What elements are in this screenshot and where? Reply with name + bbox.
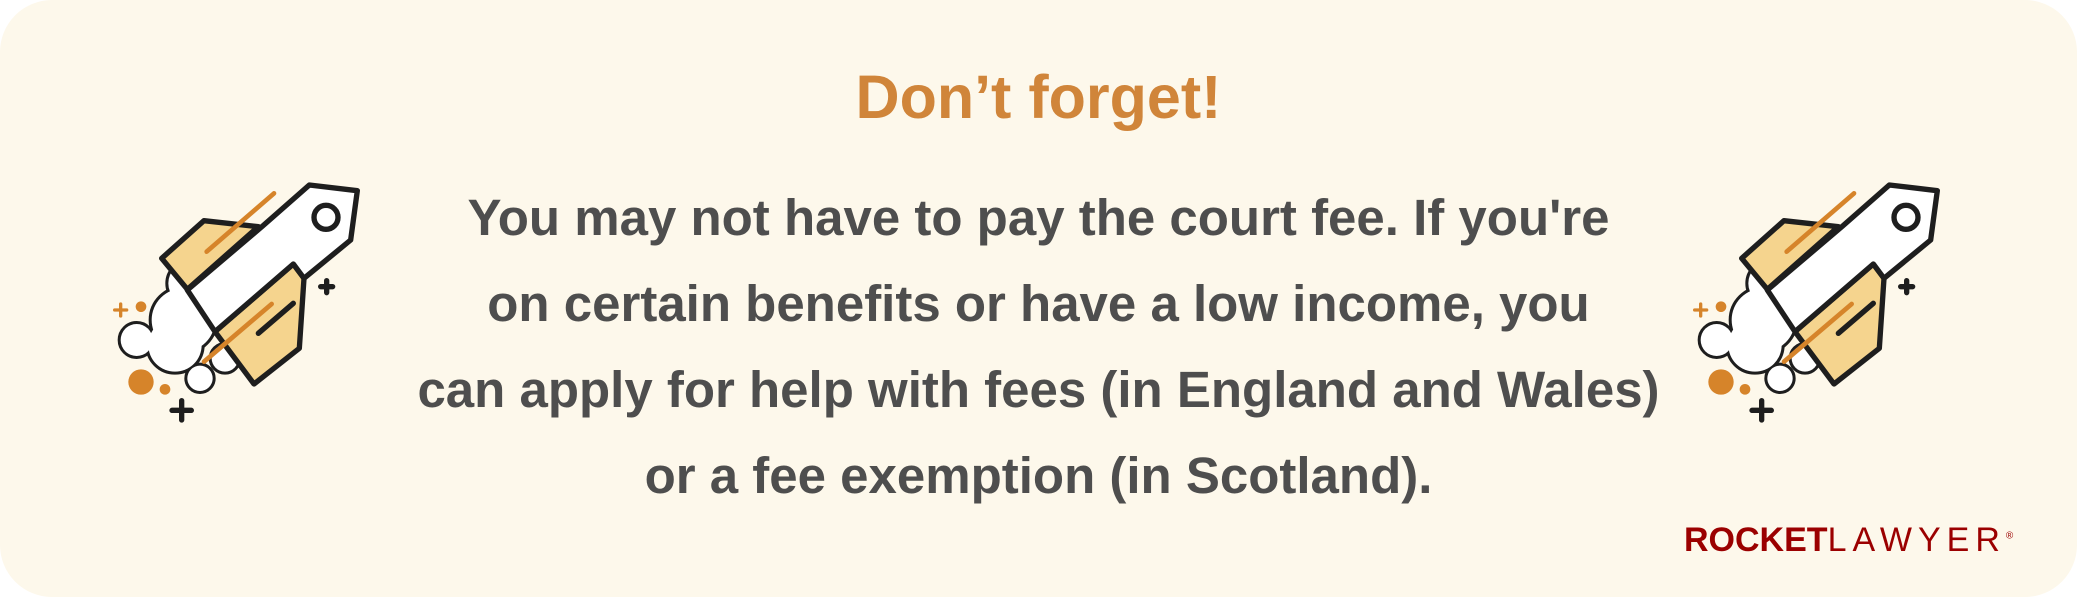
body text: can apply for help with fees (in England and Wales) (417, 361, 1660, 418)
logo: ROCKETLAWYER® (1684, 521, 2013, 559)
body text: or a fee exemption (in Scotland). (645, 447, 1432, 504)
body text (417, 189, 1660, 504)
icon: rocket right (1693, 182, 1940, 423)
title: Don’t forget! (856, 63, 1221, 131)
body text: on certain benefits or have a low income, you (487, 275, 1590, 332)
icon: rocket left (113, 182, 360, 423)
body text: You may not have to pay the court fee. If you're (468, 189, 1609, 246)
